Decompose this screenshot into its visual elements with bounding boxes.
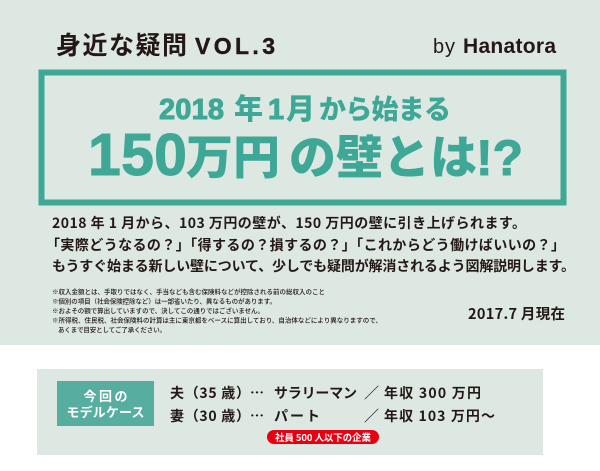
panel: title frame xyxy=(42,72,564,202)
panel: header background xyxy=(0,0,600,345)
row: wife: … xyxy=(250,406,264,426)
heading: subtitle: 2018 xyxy=(159,94,224,126)
row: husband: 年収 300 万円 xyxy=(384,383,481,403)
row: husband: ／ xyxy=(364,382,379,403)
date note: 2017.7 月現在 xyxy=(468,303,565,324)
heading: subtitle xyxy=(159,86,451,128)
row: husband: サラリーマン xyxy=(274,383,357,403)
text block: introduction: 2018 年 1 月から、103 万円の壁が、150 万円の壁に引き上げられます。 xyxy=(52,213,526,233)
heading: series title xyxy=(56,26,275,62)
row: husband: … xyxy=(250,383,264,403)
row: husband: 夫（35 歳） xyxy=(170,383,250,403)
text block: footnotes: あくまで目安としてご了承ください。 xyxy=(58,324,166,334)
heading: main title: !? xyxy=(476,130,523,186)
row: wife: 年収 103 万円〜 xyxy=(384,406,495,426)
text block: footnotes: ※個別の項目（社会保険控除など）は一部省いたり、異なるものがあります。 xyxy=(52,296,276,306)
text block: introduction: もうすぐ始まる新しい壁について、少しでも疑問が解消されるよう図解説明します。 xyxy=(52,256,575,276)
panel: model case xyxy=(37,369,543,455)
heading: series title: 身近な疑問 xyxy=(56,26,187,62)
row: wife: パート xyxy=(274,406,320,426)
text block: introduction xyxy=(46,213,575,276)
text block: introduction: 「実際どうなるの？」「得するの？損するの？」「これからどう働けばいいの？」 xyxy=(46,235,565,255)
heading: subtitle: から始まる xyxy=(319,88,451,127)
byline: Hanatora xyxy=(463,35,556,58)
byline: by xyxy=(433,36,455,58)
text block: footnotes: ※所得税、住民税、社会保険料の計算は主に東京都をベースに算出しており、自治体などにより異なりますので、 xyxy=(52,314,382,324)
label: model case xyxy=(57,381,154,426)
heading: subtitle: 1 xyxy=(268,94,284,126)
row: wife xyxy=(170,405,495,426)
text block: footnotes: ※収入金額とは、手取りではなく、手当なども含む保険料などが控除される前の総収入のこと xyxy=(52,286,325,296)
heading: main title xyxy=(88,119,523,188)
row: wife: 妻（30 歳） xyxy=(170,406,250,426)
text block: footnotes: ※およその額で算出していますので、決してこの通りではございません。 xyxy=(52,305,264,315)
badge: company size: 社員 500 人以下の企業 xyxy=(275,430,371,444)
heading: main title: 万円 xyxy=(186,119,280,188)
row: husband xyxy=(170,382,481,403)
text block: footnotes xyxy=(52,286,382,334)
heading: series title: VOL.3 xyxy=(195,33,275,59)
row: wife: ／ xyxy=(364,405,379,426)
heading: subtitle: 年 xyxy=(234,86,263,128)
heading: main title: 150 xyxy=(88,122,187,188)
heading: subtitle: 月 xyxy=(286,86,315,128)
label: model case: モデルケース xyxy=(66,402,144,421)
heading: main title: の壁とは xyxy=(289,119,477,188)
label: model case: 今回の xyxy=(84,386,128,405)
